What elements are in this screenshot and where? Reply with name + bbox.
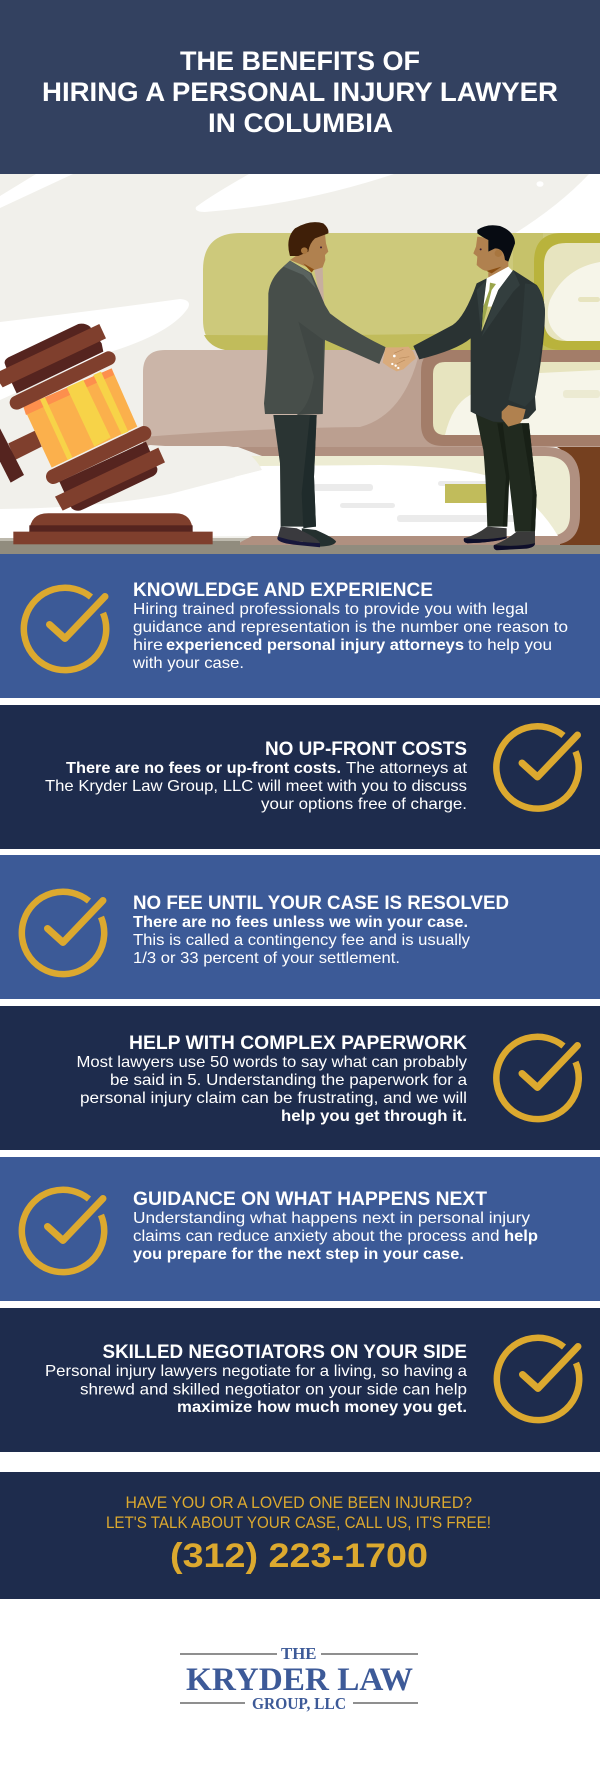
panel: call to action (0, 1472, 600, 1599)
panel: skilled negotiators on your side (0, 1308, 600, 1452)
body text: The Kryder Law Group, LLC will meet with you to discuss (45, 778, 467, 795)
body text: shrewd and skilled negotiator on your side can help (80, 1382, 467, 1398)
title: HIRING A PERSONAL INJURY LAWYER (42, 77, 558, 107)
icon: check mark (22, 892, 104, 974)
heading: HELP WITH COMPLEX PAPERWORK (129, 1033, 467, 1054)
body text: you prepare for the next step in your case. (133, 1246, 464, 1263)
heading: SKILLED NEGOTIATORS ON YOUR SIDE (102, 1342, 467, 1363)
heading: NO FEE UNTIL YOUR CASE IS RESOLVED (133, 893, 509, 914)
call to action text: LET'S TALK ABOUT YOUR CASE, CALL US, IT'S FREE! (106, 1514, 491, 1532)
tan book (143, 350, 600, 447)
phone number: (312) 223-1700 (170, 1537, 428, 1575)
icon: check mark (496, 1037, 579, 1119)
body text: guidance and representation is the number one reason to (133, 619, 568, 636)
logo: The Kryder Law Group, LLC: THE (281, 1644, 316, 1663)
title (42, 46, 558, 138)
icon: check mark (22, 1190, 104, 1272)
body text (45, 1363, 467, 1416)
heading: KNOWLEDGE AND EXPERIENCE (133, 580, 433, 601)
body text: There are no fees or up-front costs. (66, 760, 341, 777)
body text: be said in 5. Understanding the paperwork for a (110, 1072, 467, 1089)
body text (76, 1054, 467, 1125)
body text: This is called a contingency fee and is usually (133, 932, 470, 949)
title banner (0, 0, 600, 174)
icon: check mark (24, 588, 106, 670)
body text: Hiring trained professionals to provide you with legal (133, 601, 528, 618)
body text: maximize how much money you get. (177, 1399, 467, 1416)
body text: experienced personal injury attorneys (166, 637, 464, 654)
floor strip (0, 536, 600, 554)
body text: claims can reduce anxiety about the process and (133, 1228, 500, 1245)
logo: The Kryder Law Group, LLC (180, 1644, 418, 1713)
icon: gavel (0, 324, 213, 544)
body text: to help you (468, 637, 552, 654)
body text: The attorneys at (346, 760, 468, 777)
panel: guidance on what happens next (0, 1157, 600, 1301)
icon: handshake (383, 347, 416, 371)
heading: GUIDANCE ON WHAT HAPPENS NEXT (133, 1189, 487, 1210)
call to action text: HAVE YOU OR A LOVED ONE BEEN INJURED? (126, 1494, 472, 1512)
body text: 1/3 or 33 percent of your settlement. (133, 950, 400, 967)
panel: no fee until your case is resolved (0, 855, 600, 999)
body text: help (504, 1228, 538, 1245)
title: THE BENEFITS OF (180, 46, 420, 76)
body text: hire (133, 637, 163, 654)
figure: man on the left (264, 222, 386, 547)
books stack (0, 233, 600, 546)
panel: knowledge and experience (0, 554, 600, 698)
body text: with your case. (132, 655, 244, 672)
body text (133, 1210, 538, 1263)
body text: your options free of charge. (261, 796, 467, 813)
body text: There are no fees unless we win your case. (133, 914, 468, 931)
body text: Most lawyers use 50 words to say what can probably (76, 1054, 467, 1071)
body text: Personal injury lawyers negotiate for a living, so having a (45, 1363, 467, 1380)
body text (132, 601, 568, 672)
icon: check mark (497, 1338, 579, 1420)
body text: personal injury claim can be frustrating, and we will (80, 1090, 467, 1107)
heading: NO UP-FRONT COSTS (265, 739, 467, 760)
logo: The Kryder Law Group, LLC: KRYDER LAW (186, 1662, 413, 1698)
panel: help with complex paperwork (0, 1006, 600, 1150)
panel: no up-front costs (0, 705, 600, 849)
figure: man on the right (413, 225, 545, 550)
title: IN COLUMBIA (208, 108, 393, 138)
body text (133, 914, 470, 967)
body text (45, 760, 468, 813)
call to action text (106, 1494, 491, 1532)
body text: help you get through it. (281, 1108, 467, 1125)
body text: Understanding what happens next in personal injury (133, 1210, 530, 1227)
green book (203, 233, 600, 350)
brown spine and lower book (0, 445, 600, 546)
icon: check mark (496, 726, 579, 809)
illustration: handshake scene (0, 174, 600, 554)
logo: The Kryder Law Group, LLC: GROUP, LLC (252, 1694, 346, 1713)
